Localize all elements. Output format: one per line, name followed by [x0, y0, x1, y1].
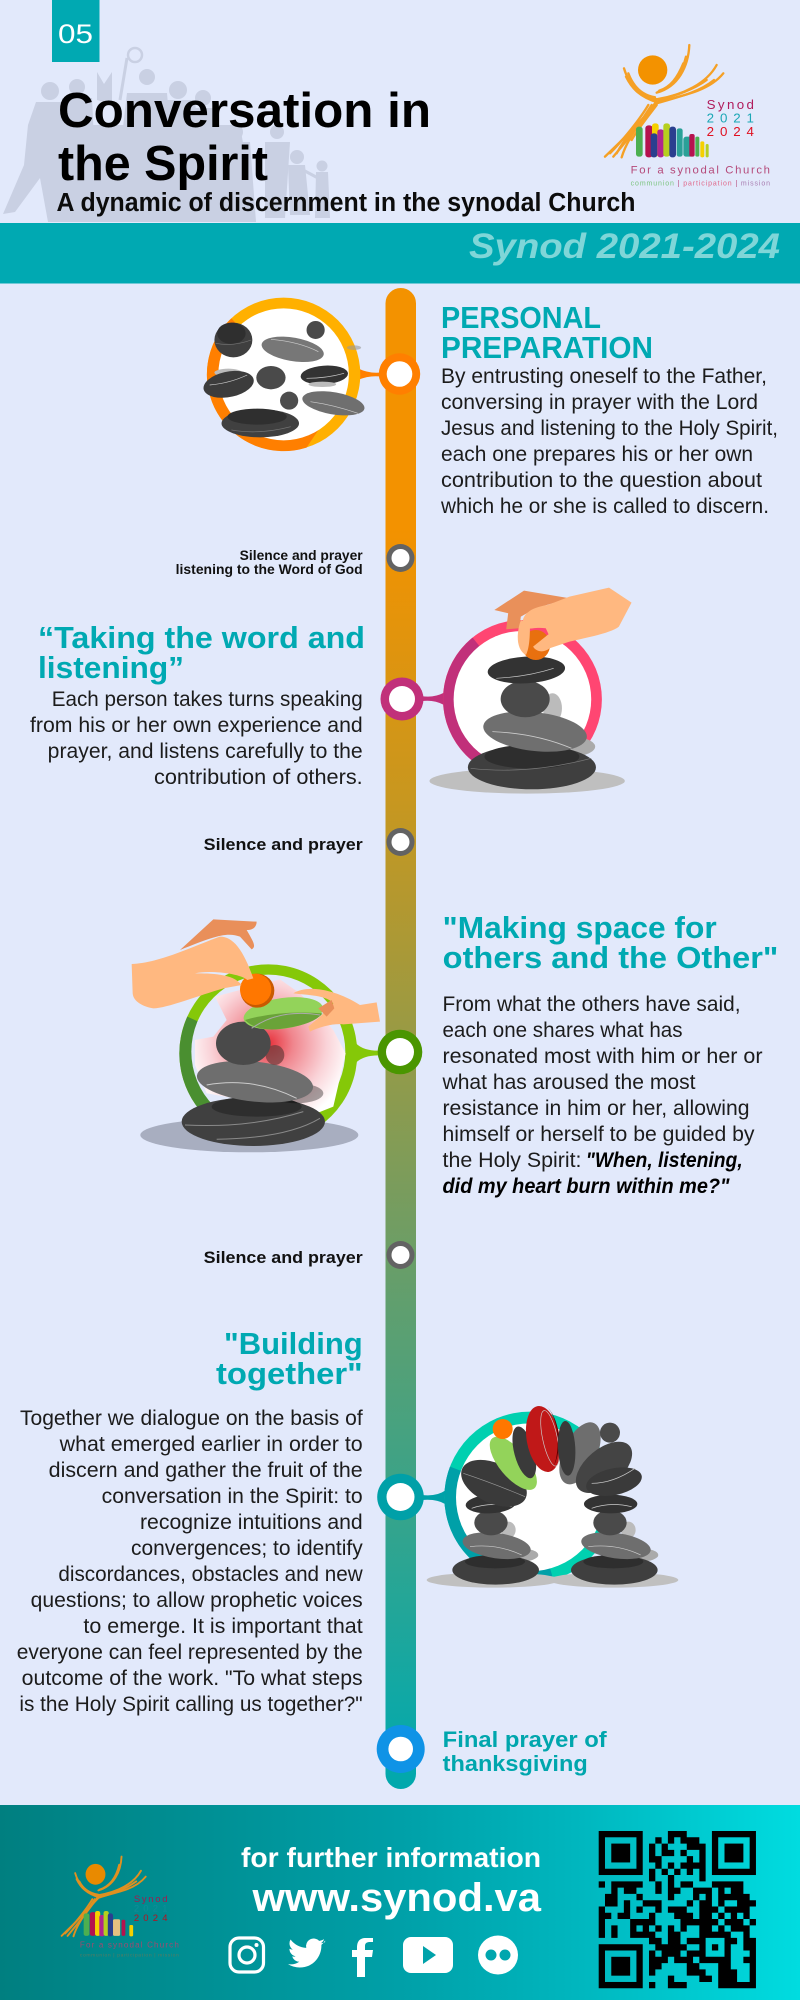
body: conversation in the Spirit: to [102, 1485, 363, 1508]
stone stack [182, 1022, 325, 1146]
footer logo: 2021 [134, 1903, 167, 1914]
body: recognize intuitions and [140, 1511, 363, 1534]
heading [441, 300, 653, 365]
ground shadow [140, 1118, 358, 1152]
timeline bar [386, 288, 416, 1789]
body [441, 993, 763, 1198]
connector [356, 1043, 378, 1063]
fingers [518, 620, 569, 655]
heading: PERSONAL [441, 300, 601, 335]
ring [443, 620, 602, 779]
label: silence and prayer 3: Silence and prayer [204, 1248, 363, 1267]
logo: Synod 2021-2024: For a synodal Church [631, 164, 770, 176]
body: the Holy Spirit: [442, 1149, 582, 1172]
heading: "Building [224, 1326, 363, 1361]
text block: taking the word and listening [30, 620, 365, 789]
body: discern and gather the fruit of the [49, 1459, 363, 1482]
body: "When, listening, [586, 1149, 743, 1172]
logo: Synod 2021-2024: communion | participation | mission [631, 181, 770, 188]
node: building together [377, 1474, 424, 1520]
label: silence and prayer 2: Silence and prayer [204, 835, 363, 854]
illustration: scattered stones in yellow ring [200, 298, 382, 451]
text block: building together [17, 1326, 364, 1716]
illustration: two hands over stone stack in green ring [132, 919, 380, 1152]
body: what emerged earlier in order to [59, 1433, 363, 1456]
body: did my heart burn within me?" [442, 1175, 730, 1198]
orange stone [522, 630, 550, 660]
label: silence and prayer, listening to the Word of God: listening to the Word of God [176, 562, 363, 577]
subtitle: A dynamic of discernment in the synodal Church [56, 189, 636, 217]
logo: Synod 2021-2024: Synod [707, 97, 754, 112]
footer logo: communion | participation | mission [80, 1952, 179, 1958]
icon: youtube [403, 1937, 453, 1973]
body [440, 365, 778, 518]
illustration: hand placing stone on stack in pink ring [421, 588, 632, 794]
connector [421, 693, 444, 705]
label: final prayer of thanksgiving [443, 1727, 607, 1776]
title [58, 84, 431, 191]
body: what has aroused the most [441, 1071, 696, 1094]
for further information: for further information [241, 1842, 541, 1873]
node: making space [378, 1030, 422, 1074]
heading: "Making space for [443, 910, 717, 945]
body: outcome of the work. "To what steps [22, 1667, 363, 1690]
top arch stones [482, 1403, 609, 1497]
body: Each person takes turns speaking [52, 688, 363, 711]
ring [444, 1412, 616, 1583]
heading [38, 620, 365, 685]
body: discordances, obstacles and new [58, 1563, 364, 1586]
right stone stack [567, 1423, 658, 1585]
footer logo: 2024 [134, 1913, 167, 1924]
heading [216, 1326, 363, 1391]
QR code [599, 1834, 756, 1985]
body: resistance in him or her, allowing [442, 1097, 750, 1120]
text block: personal preparation [440, 300, 778, 518]
burst of light [195, 979, 346, 1113]
stones [200, 321, 367, 437]
footer logo: Synod [134, 1894, 167, 1905]
footer panel [0, 1805, 800, 2000]
text block: making space for others and the Other [441, 910, 778, 1198]
body: questions; to allow prophetic voices [31, 1589, 363, 1612]
label: final prayer of thanksgiving: Final prayer of [443, 1727, 607, 1752]
ring [207, 298, 360, 451]
body: Jesus and listening to the Holy Spirit, [441, 417, 778, 440]
body: each one prepares his or her own [441, 443, 753, 466]
logo: Synod 2021-2024: 2021 [707, 110, 754, 125]
body: From what the others have said, [442, 993, 740, 1016]
footer logo [62, 1857, 179, 1958]
node: taking the word [380, 678, 424, 720]
icon: twitter [288, 1939, 325, 1968]
orange stone [240, 974, 274, 1008]
banner: Synod 2021-2024 [0, 223, 800, 284]
connector [358, 368, 382, 380]
body: prayer, and listens carefully to the [48, 740, 363, 763]
body: himself or herself to be guided by [442, 1123, 755, 1146]
body: is the Holy Spirit calling us together?" [19, 1693, 363, 1716]
left stone stack [452, 1450, 539, 1585]
body [17, 1407, 364, 1716]
body: Together we dialogue on the basis of [20, 1407, 363, 1430]
logo: Synod 2021-2024 [605, 45, 770, 188]
heading: listening” [38, 650, 184, 685]
green stone [242, 993, 325, 1034]
right hand [293, 989, 380, 1032]
node: personal preparation [379, 353, 420, 395]
section number badge: 05 [58, 19, 93, 49]
icon: flickr [478, 1936, 518, 1974]
heading: PREPARATION [441, 330, 653, 365]
heading: “Taking the word and [38, 620, 365, 655]
body: each one shares what has [442, 1019, 682, 1042]
ring [179, 964, 357, 1142]
label: final prayer of thanksgiving: thanksgiving [443, 1751, 588, 1776]
banner: Synod 2021-2024: Synod 2021-2024 [469, 227, 780, 266]
body: to emerge. It is important that [83, 1615, 363, 1638]
body [30, 688, 363, 789]
hand back [494, 588, 632, 642]
footer logo: For a synodal Church [80, 1941, 179, 1950]
ground shadow [429, 768, 625, 794]
body: resonated most with him or her or [442, 1045, 763, 1068]
node: silence and prayer 1 [386, 544, 414, 572]
title: Conversation in [58, 84, 431, 138]
silhouette of walking people [3, 48, 330, 222]
label: silence and prayer, listening to the Word of God: Silence and prayer [240, 548, 363, 563]
node: final prayer [377, 1725, 425, 1773]
icon: instagram [230, 1938, 264, 1972]
logo: Synod 2021-2024: 2024 [707, 124, 755, 139]
heading [443, 910, 778, 975]
website: www.synod.va [251, 1876, 542, 1920]
body: which he or she is called to discern. [440, 495, 769, 518]
section number badge [52, 0, 100, 62]
ground shadows [427, 1572, 678, 1588]
title: the Spirit [58, 137, 268, 191]
body: everyone can feel represented by the [17, 1641, 363, 1664]
illustration: arch of stones in teal ring [422, 1403, 678, 1588]
heading: others and the Other" [443, 940, 778, 975]
body: By entrusting oneself to the Father, [441, 365, 767, 388]
body: convergences; to identify [131, 1537, 363, 1560]
body: contribution of others. [154, 766, 363, 789]
connector [422, 1491, 445, 1504]
body: contribution to the question about [441, 469, 762, 492]
label: silence and prayer, listening to the Word of God [176, 548, 363, 577]
left hand [132, 919, 257, 1008]
icon: facebook [352, 1938, 373, 1977]
node: silence and prayer 3 [386, 1241, 414, 1269]
body: conversing in prayer with the Lord [441, 391, 758, 414]
node: silence and prayer 2 [386, 828, 414, 856]
body: from his or her own experience and [30, 714, 363, 737]
stone stack [468, 654, 596, 789]
heading: together" [216, 1356, 363, 1391]
